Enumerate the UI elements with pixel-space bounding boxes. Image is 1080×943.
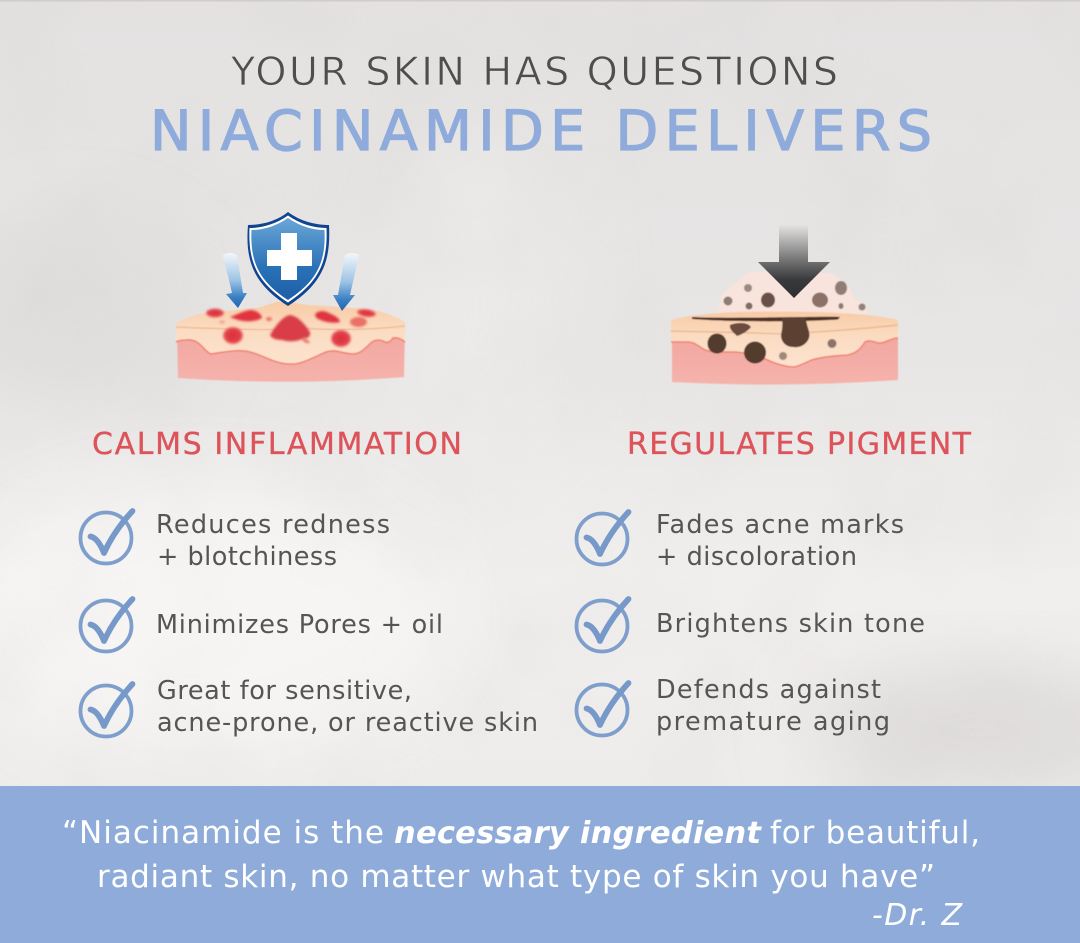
- item: defends against aging: Defends against: [656, 675, 881, 705]
- inflammation spots: [206, 308, 376, 347]
- panel: regulates pigment: [576, 427, 972, 737]
- illustration: calms inflammation: [176, 302, 405, 382]
- quote text: necessary ingredient: [394, 816, 762, 851]
- item: brightens skin tone: Brightens skin tone: [656, 609, 925, 639]
- item: fades acne marks: + discoloration: [656, 542, 857, 572]
- panel: calms inflammation: [80, 427, 538, 738]
- heading: calms inflammation: CALMS INFLAMMATION: [92, 427, 462, 462]
- item: reduces redness: + blotchiness: [157, 542, 337, 572]
- quote text: [62, 815, 980, 895]
- item: fades acne marks: Fades acne marks: [656, 510, 904, 540]
- icon: left blue arrow: [223, 253, 247, 308]
- pigment spots: [708, 281, 866, 364]
- icon: right blue arrow: [333, 253, 359, 311]
- skin block: [176, 302, 405, 382]
- attribution: -Dr. Z: [872, 898, 963, 933]
- item: great for sensitive: Great for sensitive,: [157, 676, 412, 706]
- item: minimizes pores: [80, 599, 443, 652]
- heading: regulates pigment: REGULATES PIGMENT: [627, 427, 972, 462]
- item: brightens skin tone: [576, 599, 925, 652]
- title line: niacinamide delivers: NIACINAMIDE DELIVERS: [150, 99, 932, 164]
- item: defends against aging: [576, 675, 890, 737]
- item: minimizes pores: Minimizes Pores + oil: [156, 610, 443, 640]
- icon: shield with cross: [247, 212, 329, 306]
- item: fades acne marks: [576, 510, 904, 572]
- item: defends against aging: premature aging: [656, 707, 890, 737]
- item: great for sensitive: acne-prone, or reactive skin: [157, 708, 538, 738]
- quote text: radiant skin, no matter what type of skin you have”: [97, 859, 935, 895]
- illustration: regulates pigment: [671, 272, 898, 385]
- quote banner: [0, 786, 1080, 943]
- pigment mound: [718, 272, 868, 316]
- item: great for sensitive: [80, 676, 538, 738]
- quote text: for beautiful,: [770, 815, 980, 851]
- icon: dark down arrow: [758, 224, 830, 298]
- skin block: [671, 312, 898, 385]
- item: reduces redness: Reduces redness: [156, 510, 390, 540]
- quote text: “Niacinamide is the: [62, 815, 384, 851]
- item: reduces redness: [80, 510, 390, 572]
- title line: your skin has questions: YOUR SKIN HAS QUESTIONS: [230, 49, 838, 95]
